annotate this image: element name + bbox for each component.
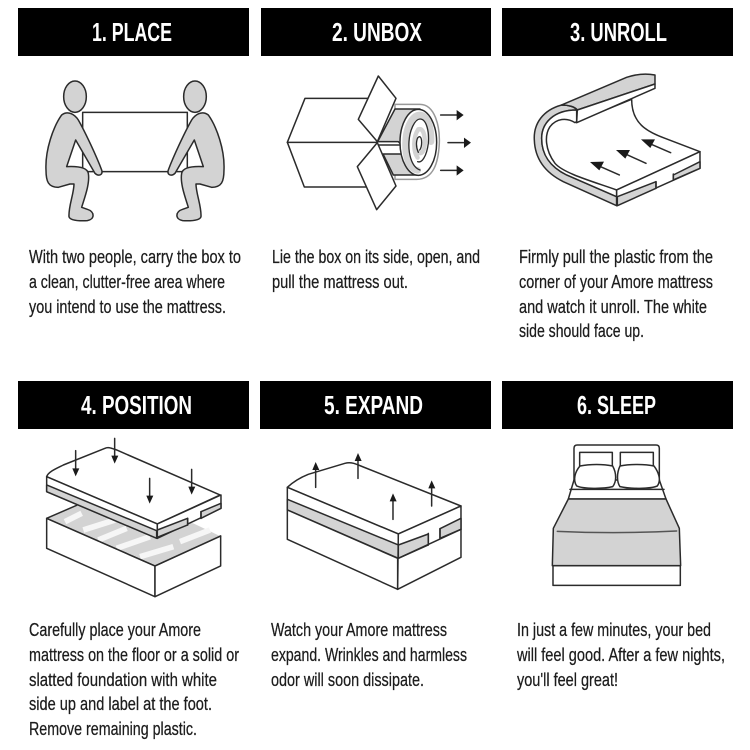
icon: mattress unrolling <box>534 74 700 206</box>
panel: step 4 position <box>18 381 249 739</box>
heading: 6. Sleep <box>502 381 733 429</box>
heading: 2. Unbox <box>261 8 491 56</box>
text: step 5 description: expand. Wrinkles and harmless <box>271 644 467 665</box>
text: step 5 description: Watch your Amore mattress <box>271 619 447 640</box>
heading: 1. Place <box>18 8 249 56</box>
heading: 3. Unroll <box>502 8 733 56</box>
icon: expanding mattress <box>287 453 461 589</box>
text: step 4 description <box>29 619 239 739</box>
icon: mattress lowered onto slatted foundation <box>47 438 221 597</box>
panel: step 6 sleep <box>502 381 733 690</box>
panel: step 5 expand <box>260 381 491 690</box>
text: step 6 description: you'll feel great! <box>517 669 618 690</box>
panel: step 2 unbox <box>261 8 491 292</box>
text: step 1 description: you intend to use the mattress. <box>29 296 226 317</box>
text: step 3 description: side should face up. <box>519 320 644 341</box>
text: step 5 description: odor will soon dissipate. <box>271 669 424 690</box>
text: step 4 description: side up and label at the foot. <box>29 693 212 714</box>
text: step 1 description <box>29 246 241 317</box>
text: step 2 description <box>272 246 480 292</box>
heading: 3. Unroll: 3. UNROLL <box>570 17 667 47</box>
heading: 6. Sleep: 6. SLEEP <box>577 390 656 420</box>
heading: 4. Position: 4. POSITION <box>81 390 192 420</box>
panel: step 1 place <box>18 8 249 317</box>
text: step 4 description: mattress on the floor or a solid or <box>29 644 239 665</box>
icon: two people carrying box <box>46 81 224 221</box>
heading: 4. Position <box>18 381 249 429</box>
text: step 1 description: With two people, carry the box to <box>29 246 241 267</box>
text: step 1 description: a clean, clutter-free area where <box>29 271 225 292</box>
text: step 4 description: Carefully place your Amore <box>29 619 201 640</box>
text: step 4 description: Remove remaining plastic. <box>29 718 197 739</box>
heading: 5. Expand <box>260 381 491 429</box>
text: step 4 description: slatted foundation with white <box>29 669 217 690</box>
text: step 5 description <box>271 619 467 690</box>
text: step 6 description <box>516 619 725 690</box>
panel: step 3 unroll <box>502 8 733 341</box>
icon: made bed <box>552 445 681 585</box>
text: step 3 description <box>519 246 713 341</box>
text: step 2 description: pull the mattress out. <box>272 271 408 292</box>
icon: box with rolled mattress <box>287 76 471 210</box>
text: step 2 description: Lie the box on its side, open, and <box>272 246 480 267</box>
heading: 5. Expand: 5. EXPAND <box>324 390 423 420</box>
heading: 2. Unbox: 2. UNBOX <box>332 17 422 47</box>
heading: 1. Place: 1. PLACE <box>92 17 172 47</box>
